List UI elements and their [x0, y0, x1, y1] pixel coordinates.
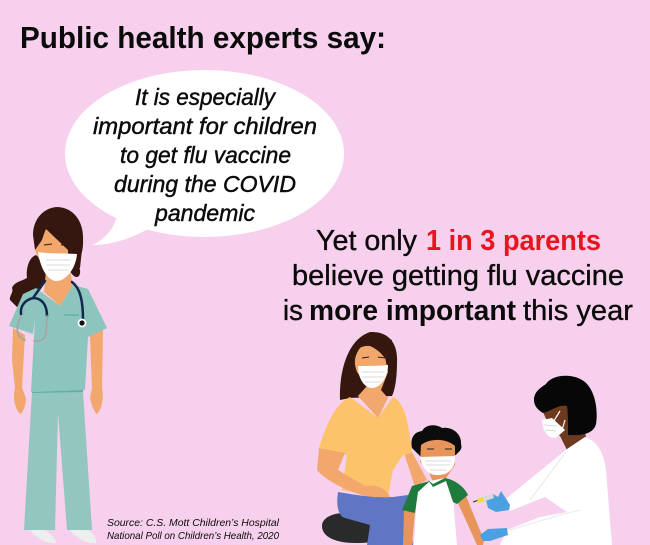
speech bubble	[65, 70, 344, 245]
neck and face	[543, 400, 586, 450]
face and neck	[420, 440, 455, 482]
statistic statement	[283, 225, 634, 327]
pocket	[64, 314, 79, 316]
syringe	[473, 494, 494, 503]
hair fringe	[355, 335, 392, 362]
statistic statement: is	[283, 295, 303, 327]
hair	[534, 376, 597, 435]
face mask	[38, 252, 77, 281]
mask pleats	[544, 425, 557, 431]
statistic statement: more important	[309, 295, 516, 327]
mask strap	[552, 411, 565, 430]
pants	[24, 392, 92, 530]
pants	[337, 492, 413, 545]
statistic statement: 1 in 3 parents	[426, 225, 601, 257]
stool	[322, 513, 392, 543]
face mask	[358, 365, 388, 388]
neck and face	[35, 229, 73, 306]
stethoscope chest piece	[78, 320, 86, 326]
arms	[403, 496, 484, 545]
bubble quote text: during the COVID	[114, 171, 296, 197]
coat fold	[510, 452, 580, 530]
upper glove	[486, 491, 510, 512]
left arm and hand	[317, 448, 390, 497]
source note	[107, 517, 280, 542]
bubble quote text: important for children	[93, 113, 317, 139]
waist shadow	[32, 390, 83, 393]
white shirt	[414, 478, 457, 545]
bubble quote text: It is especially	[135, 84, 276, 110]
ponytail	[10, 255, 47, 307]
source note: National Poll on Children’s Health, 2020	[107, 530, 279, 542]
right arm	[403, 450, 427, 487]
illustration: doctor with stethoscope	[9, 207, 107, 543]
arms	[12, 328, 103, 414]
mask pleats	[425, 461, 451, 470]
shoes	[30, 530, 96, 543]
hair back	[33, 207, 83, 277]
statistic statement: Yet only	[316, 225, 418, 257]
green sleeves and collar	[402, 478, 468, 513]
source note: Source: C.S. Mott Children’s Hospital	[107, 517, 280, 529]
yellow shirt	[319, 397, 412, 496]
bubble quote text: to get flu vaccine	[120, 142, 291, 168]
title: Public health experts say:	[20, 20, 386, 55]
neck and face	[355, 346, 388, 418]
bubble quote text	[93, 84, 317, 226]
face mask	[542, 418, 565, 438]
illustration: vaccinating nurse	[473, 376, 612, 545]
closed eyes	[362, 357, 385, 358]
statistic statement: believe getting flu vaccine	[292, 260, 624, 292]
mask pleats	[46, 260, 70, 270]
stethoscope	[17, 281, 83, 341]
illustration: child	[402, 425, 484, 545]
bubble quote text: pandemic	[154, 200, 255, 226]
mask pleats	[362, 372, 384, 382]
white coat	[500, 437, 612, 545]
face mask	[420, 456, 455, 475]
scrub top	[9, 285, 107, 392]
hair fringe	[45, 212, 83, 275]
hair	[340, 332, 397, 400]
closed eyes	[427, 448, 452, 450]
lower glove	[480, 528, 508, 541]
hair	[411, 425, 461, 456]
statistic statement: this year	[523, 295, 634, 327]
closed eyes	[44, 244, 66, 245]
illustration: mother on stool	[317, 332, 427, 545]
